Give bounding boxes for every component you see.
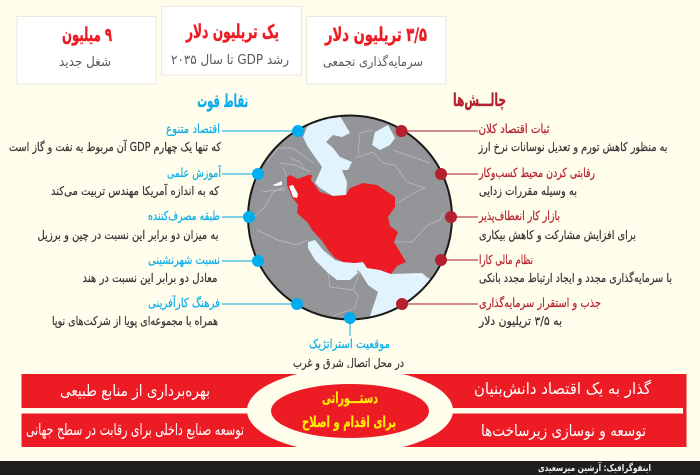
sea: Aral xyxy=(372,125,395,150)
country borders xyxy=(250,130,444,316)
challenge 3 text: برای افزایش مشارکت و کاهش بیکاری xyxy=(479,228,636,243)
lakes xyxy=(289,185,298,198)
strength 3 title: طبقه مصرف‌کننده xyxy=(148,208,220,224)
strength 4 text: معادل دو برابر این نسبت در هند xyxy=(82,271,218,286)
challenges list xyxy=(478,121,672,329)
panel: 3.5 trillion dollars xyxy=(306,16,446,84)
challenge 2 title: رقابتی کردن محیط کسب‌وکار xyxy=(478,165,595,181)
credit: اینفوگرافیک: آرشین میرسعیدی xyxy=(538,461,651,474)
strength 6 text: در محل اتصال شرق و غرب xyxy=(293,356,404,371)
center ellipse xyxy=(271,384,429,438)
challenge 3 title: بازار کار انعطاف‌پذیر xyxy=(478,208,560,224)
action: knowledge economy: گذار به یک اقتصاد دانش‌بنیان xyxy=(474,379,651,399)
strength 2 title: آموزش علمی xyxy=(167,165,221,181)
heading: strengths: نقاط قوت xyxy=(197,91,248,112)
stat label: شغل جدید xyxy=(59,55,111,70)
connectors and dots: strengths xyxy=(222,125,356,336)
strength 1 text: که تنها یک چهارم GDP آن مربوط به نفت و گاز است xyxy=(9,139,221,155)
sea: Caspian xyxy=(303,116,352,196)
Iran xyxy=(287,175,406,274)
challenge 5 title: جذب و استقرار سرمایه‌گذاری xyxy=(479,295,601,311)
stat label: سرمایه‌گذاری تجمعی xyxy=(323,54,423,70)
strength 4 title: نسبت شهرنشینی xyxy=(148,252,220,268)
action: infrastructure: توسعه و نوسازی زیرساخت‌ها xyxy=(481,421,646,441)
challenge 1 title: ثبات اقتصاد کلان xyxy=(478,121,550,136)
stat label: رشد GDP تا سال ۲۰۳۵ xyxy=(171,53,289,68)
agenda title: دستـــوراتی xyxy=(322,389,378,407)
strength 2 text: که به اندازه آمریکا مهندس تربیت می‌کند xyxy=(51,183,219,199)
footer bar xyxy=(0,461,700,475)
strength 5 title: فرهنگ کارآفرینی xyxy=(148,295,220,311)
panel: 9 million jobs xyxy=(17,16,156,84)
agenda subtitle: برای اقدام و اصلاح xyxy=(302,413,396,431)
action: natural resources: بهره‌برداری از منابع طبیعی xyxy=(60,381,210,401)
stat value: ۳/۵ تریلیون دلار xyxy=(324,24,427,46)
strength 3 text: به میزان دو برابر این نسبت در چین و برزیل xyxy=(38,228,218,243)
connectors and dots: challenges xyxy=(396,125,478,310)
heading: challenges: چالـــش‌ها xyxy=(453,90,506,111)
challenge 2 text: به وسیله مقررات زدایی xyxy=(479,184,577,199)
globe outline xyxy=(248,116,452,320)
strengths list xyxy=(9,121,404,371)
sea: Persian Gulf and Gulf of Oman xyxy=(308,240,430,316)
stat value: ۹ میلیون xyxy=(62,24,112,46)
strength 1 title: اقتصاد متنوع xyxy=(166,121,220,137)
globe map xyxy=(248,116,460,330)
challenge 4 title: نظام مالی کارا xyxy=(479,252,533,268)
panel: one trillion dollars xyxy=(162,6,302,75)
action: domestic industries: توسعه صنایع داخلی برای رقابت در سطح جهانی xyxy=(26,420,244,440)
panel: agenda banner xyxy=(22,368,686,453)
strength 5 text: همراه با مجموعه‌ای پویا از شرکت‌های نوپا xyxy=(52,314,218,329)
challenge 5 text: به ۳/۵ تریلیون دلار xyxy=(478,314,562,329)
stat value: یک تریلیون دلار xyxy=(185,21,279,43)
strength 6 title: موقعیت استراتژیک xyxy=(309,336,390,352)
